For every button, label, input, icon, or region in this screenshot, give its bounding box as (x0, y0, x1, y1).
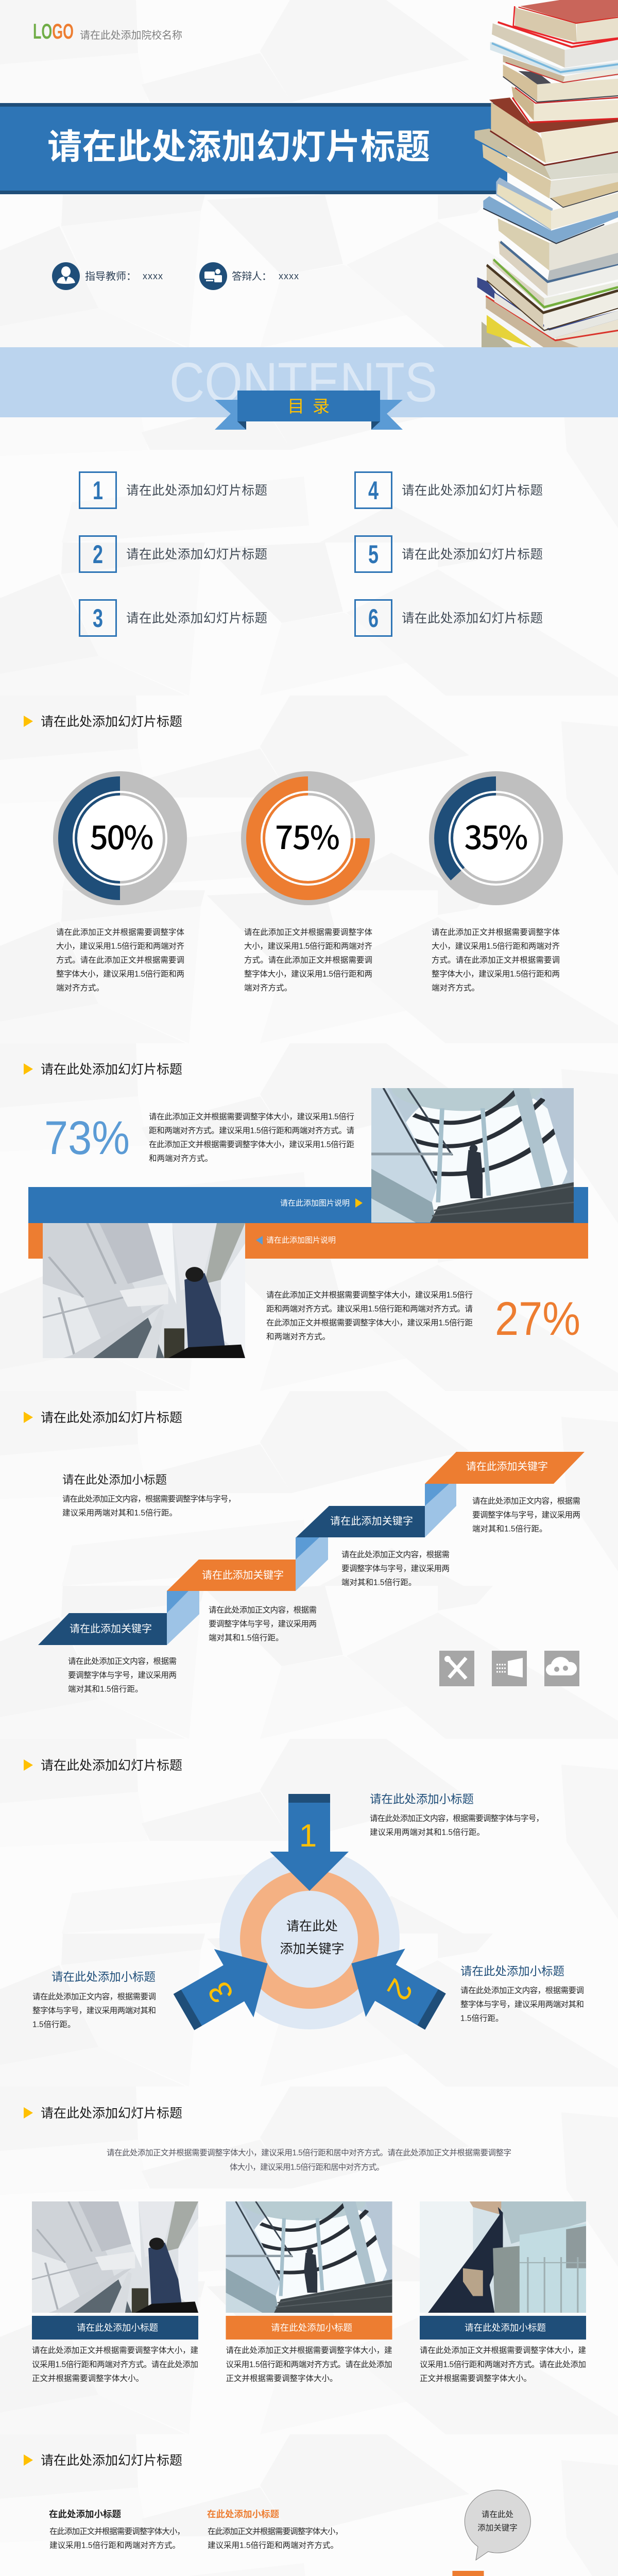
step text lower: 端对其和1.5倍行距。 (209, 1633, 284, 1642)
legend black (49, 2509, 185, 2550)
item 3: 请在此处添加幻灯片标题 (126, 611, 267, 625)
caption bar: 请在此处添加小标题 (271, 2323, 352, 2333)
heading: bars: 请在此处添加幻灯片标题 (41, 2453, 182, 2468)
text block: point 3: 1.5倍行距。 (32, 2020, 76, 2029)
arrow 3 (164, 1929, 287, 2046)
text: 27%: 和两端对齐方式。 (266, 1332, 330, 1342)
step text left: 要调整字体与字号，建议采用两 (68, 1670, 177, 1680)
centered intro (107, 2148, 511, 2172)
title band (0, 103, 507, 194)
text: 27%: 在此添加正文并根据需要调整字体大小，建议采用1.5倍行距 (266, 1318, 473, 1327)
item 5: 请在此处添加幻灯片标题 (402, 547, 543, 562)
step text left: 请在此处添加正文内容，根据需 (68, 1657, 177, 1666)
text block: point 1 (370, 1793, 544, 1837)
main title: 请在此处添加幻灯片标题 (47, 128, 430, 166)
step text middle: 请在此处添加正文内容，根据需 (341, 1550, 450, 1559)
step top orange: 请在此添加关键字 (466, 1461, 548, 1472)
text: 27%: 距和两端对齐方式。建议采用1.5倍行距和两端对齐方式。请 (266, 1304, 473, 1314)
donut text 3: 请在此添加正文并根据需要调整字体 (432, 927, 560, 937)
text: 73%: 和两端对齐方式。 (149, 1154, 213, 1163)
text: 请在此处添加正文并根据需要调整字体大小，建 (226, 2346, 392, 2355)
item 2: 请在此处添加幻灯片标题 (126, 547, 267, 562)
steps subtitle and text: 建议采用两端对其和1.5倍行距。 (62, 1509, 177, 1518)
step text lower: 请在此处添加正文内容，根据需 (209, 1605, 317, 1615)
photo (32, 2201, 198, 2313)
text block: point 2 (460, 1965, 584, 2023)
step bottom navy (38, 1613, 167, 1645)
text: 请在此处添加正文并根据需要调整字体大小，建 (32, 2346, 198, 2355)
contents watermark: CONTENTS (169, 351, 437, 413)
icon: building (492, 1651, 527, 1686)
step text lower: 要调整字体与字号，建议采用两 (209, 1619, 317, 1629)
text block: point 2: 1.5倍行距。 (460, 2013, 504, 2023)
legend orange (207, 2509, 343, 2550)
donut text 1: 大小，建议采用1.5倍行距和两端对齐 (56, 942, 184, 951)
donut: 75%: 75% (275, 812, 340, 858)
text block: point 2: 请在此处添加正文内容，根据需要调 (460, 1986, 584, 1995)
orange band (28, 1223, 588, 1259)
logo: LOGO (33, 19, 74, 43)
ribbon: contents title (215, 391, 403, 430)
donut text 1: 端对齐方式。 (56, 983, 104, 992)
donut text 2: 请在此添加正文并根据需要调整字体 (244, 927, 372, 937)
donut text 2: 方式。请在此添加正文并根据需要调 (244, 955, 372, 964)
photo (226, 2182, 392, 2315)
donut text 3: 整字体大小，建议采用1.5倍行距和两 (432, 970, 560, 979)
centered intro: 请在此处添加正文并根据需要调整字体大小，建议采用1.5倍行距和居中对齐方式。请在此处添加正文并根据需要调整字 (107, 2148, 511, 2158)
text: 正文并根据需要调整字体大小。 (32, 2374, 144, 2383)
icon: tools (439, 1651, 474, 1686)
callout bubble: 请在此处 (482, 2510, 513, 2519)
donut: 35% (429, 771, 563, 905)
step lower orange: 请在此添加关键字 (202, 1569, 284, 1581)
photo card 3 (420, 2201, 586, 2383)
photo card 2 (226, 2182, 392, 2383)
step text left: 端对其和1.5倍行距。 (68, 1685, 143, 1694)
callout bubble (465, 2490, 530, 2560)
icon: cloud share (544, 1651, 579, 1686)
item 6: 6 (368, 604, 379, 633)
step middle navy (296, 1506, 425, 1537)
respondent: xxxx (279, 271, 299, 281)
text block: point 3: 整字体与字号，建议采用两端对其和 (32, 2006, 156, 2015)
photo card 1 (32, 2201, 198, 2383)
text block: point 1: 请在此处添加正文内容，根据需要调整字体与字号， (370, 1814, 544, 1823)
step text left (68, 1657, 177, 1694)
staircase ribbon (38, 1452, 585, 1645)
step text lower (209, 1605, 317, 1642)
step text right: 请在此处添加正文内容，根据需 (472, 1496, 580, 1505)
center keyword: 添加关键字 (280, 1942, 345, 1956)
caption bar: 请在此处添加小标题 (77, 2323, 158, 2333)
text block: point 2: 整字体与字号，建议采用两端对其和 (460, 2000, 584, 2009)
heading: converge: 请在此处添加幻灯片标题 (41, 1758, 182, 1773)
text block: point 3: 请在此处添加小标题 (52, 1971, 156, 1984)
fold 3 (167, 1591, 199, 1645)
heading: percent section: 请在此处添加幻灯片标题 (41, 1062, 182, 1077)
step text middle: 端对其和1.5倍行距。 (341, 1578, 417, 1587)
donut text 1: 方式。请在此添加正文并根据需要调 (56, 955, 184, 964)
donut: 75% (241, 771, 375, 905)
donut text 2: 大小，建议采用1.5倍行距和两端对齐 (244, 942, 372, 951)
fold 1 (425, 1484, 456, 1537)
donut text 1 (56, 927, 184, 992)
item 6 (355, 600, 543, 636)
donut text 3 (432, 927, 560, 992)
donut text 1: 请在此添加正文并根据需要调整字体 (56, 927, 184, 937)
step top orange (425, 1452, 585, 1484)
step text right: 端对其和1.5倍行距。 (472, 1524, 547, 1533)
heading: steps: 请在此处添加幻灯片标题 (41, 1411, 182, 1425)
donut text 1: 整字体大小，建议采用1.5倍行距和两 (56, 970, 184, 979)
caption left: 请在此添加图片说明 (266, 1236, 336, 1245)
caption right: 请在此添加图片说明 (280, 1199, 350, 1208)
arrow 2 (332, 1929, 455, 2046)
text block: point 3 (32, 1971, 156, 2029)
icon: teacher (52, 262, 80, 290)
heading: donuts: 请在此处添加幻灯片标题 (41, 715, 182, 729)
step text middle (341, 1550, 450, 1587)
item 4 (355, 472, 543, 508)
text: 议采用1.5倍行距和两端对齐方式。请在此处添加 (420, 2360, 586, 2369)
steps subtitle and text: 请在此处添加小标题 (62, 1473, 167, 1486)
donut text 3: 方式。请在此添加正文并根据需要调 (432, 955, 560, 964)
legend black: 在此添加正文并根据需要调整字体大小， (49, 2527, 185, 2536)
text: 27%: 请在此添加正文并根据需要调整字体大小，建议采用1.5倍行 (266, 1290, 473, 1299)
center keyword: 请在此处 (286, 1919, 338, 1934)
text: 正文并根据需要调整字体大小。 (420, 2374, 531, 2383)
legend orange: 在此处添加小标题 (207, 2509, 279, 2519)
callout bubble: 添加关键字 (477, 2523, 518, 2533)
donut text 2: 整字体大小，建议采用1.5倍行距和两 (244, 970, 372, 979)
text: 正文并根据需要调整字体大小。 (226, 2374, 338, 2383)
respondent (199, 262, 299, 290)
text block: point 3: 请在此处添加正文内容，根据需要调 (32, 1992, 156, 2001)
text: 请在此处添加正文并根据需要调整字体大小，建 (420, 2346, 586, 2355)
donut text 2 (244, 927, 372, 992)
stat: 73%: 73% (44, 1112, 130, 1164)
step text right: 要调整字体与字号，建议采用两 (472, 1511, 580, 1520)
caption bar (420, 2316, 586, 2340)
step text right (472, 1496, 580, 1533)
fold 2 (296, 1537, 328, 1591)
photo (420, 2201, 586, 2313)
text (226, 2346, 392, 2383)
item 1: 1 (93, 476, 103, 505)
contents band (0, 347, 618, 417)
donut: 35%: 35% (465, 812, 528, 858)
centered intro: 体大小，建议采用1.5倍行距和居中对齐方式。 (230, 2163, 384, 2172)
contents list (79, 472, 543, 636)
text: 议采用1.5倍行距和两端对齐方式。请在此处添加 (32, 2360, 198, 2369)
text block: point 1: 请在此处添加小标题 (370, 1793, 474, 1806)
heading: photos: 请在此处添加幻灯片标题 (41, 2106, 182, 2121)
item 2 (79, 536, 267, 572)
item 3 (79, 600, 267, 636)
arrow 1 (270, 1794, 349, 1891)
photo: escalator (43, 1223, 245, 1358)
item 5 (355, 536, 543, 572)
text: 73%: 请在此添加正文并根据需要调整字体大小，建议采用1.5倍行 (149, 1112, 354, 1121)
stat: 27%: 27% (495, 1293, 580, 1345)
item 5: 5 (368, 540, 379, 569)
legend black: 在此处添加小标题 (49, 2509, 122, 2519)
caption bar (226, 2316, 392, 2340)
legend black: 建议采用1.5倍行距和两端对齐方式。 (49, 2541, 180, 2550)
caption bar: 请在此处添加小标题 (465, 2323, 546, 2333)
item 2: 2 (93, 540, 103, 569)
caption bar (32, 2316, 198, 2340)
donut text 3: 大小，建议采用1.5倍行距和两端对齐 (432, 942, 560, 951)
steps subtitle and text: 请在此处添加正文内容，根据需要调整字体与字号， (62, 1494, 236, 1503)
step bottom navy: 请在此添加关键字 (70, 1623, 152, 1635)
ribbon: contents title: 目 (287, 397, 304, 416)
legend orange: 在此添加正文并根据需要调整字体大小， (208, 2527, 343, 2536)
bar chart (0, 2571, 618, 2576)
arrow 1: 1 (299, 1818, 317, 1854)
text: 议采用1.5倍行距和两端对齐方式。请在此处添加 (226, 2360, 392, 2369)
text: 73%: 距和两端对齐方式。建议采用1.5倍行距和两端对齐方式。请 (149, 1126, 354, 1136)
step text middle: 要调整字体与字号，建议采用两 (341, 1564, 450, 1573)
donut: 50%: 50% (90, 812, 153, 858)
step lower orange (167, 1560, 296, 1591)
donut: 50% (53, 771, 187, 905)
school name: 请在此处添加院校名称 (80, 29, 182, 41)
advisor: 指导教师： (85, 270, 136, 282)
center keyword (280, 1919, 345, 1956)
advisor (52, 262, 163, 290)
respondent: 答辩人： (232, 270, 272, 282)
advisor: xxxx (143, 271, 163, 281)
photo: stair tower (371, 1065, 574, 1225)
text (32, 2346, 198, 2383)
books image: top (475, 0, 618, 348)
donut text 2: 端对齐方式。 (244, 983, 292, 992)
item 3: 3 (93, 604, 103, 633)
item 6: 请在此处添加幻灯片标题 (402, 611, 543, 625)
item 4: 请在此处添加幻灯片标题 (402, 483, 543, 498)
item 4: 4 (368, 476, 379, 505)
text block: point 2: 请在此处添加小标题 (460, 1965, 564, 1978)
steps subtitle and text (62, 1473, 236, 1518)
text: 73%: 在此添加正文并根据需要调整字体大小，建议采用1.5倍行距 (149, 1140, 354, 1149)
blue band (28, 1187, 588, 1223)
item 1: 请在此处添加幻灯片标题 (126, 483, 267, 498)
icon: respondent (199, 262, 227, 290)
item 1 (79, 472, 267, 508)
text block: point 1: 建议采用两端对其和1.5倍行距。 (370, 1828, 485, 1837)
donut text 3: 端对齐方式。 (432, 983, 479, 992)
arrow 2: 2 (380, 1973, 420, 2006)
concentric circles (219, 1849, 400, 2029)
text: 73% (149, 1112, 354, 1163)
text: 27% (266, 1290, 473, 1342)
text (420, 2346, 586, 2383)
arrow 3: 3 (201, 1976, 241, 2009)
step middle navy: 请在此添加关键字 (330, 1515, 413, 1527)
legend orange: 建议采用1.5倍行距和两端对齐方式。 (208, 2541, 338, 2550)
ribbon: contents title: 录 (313, 397, 330, 416)
